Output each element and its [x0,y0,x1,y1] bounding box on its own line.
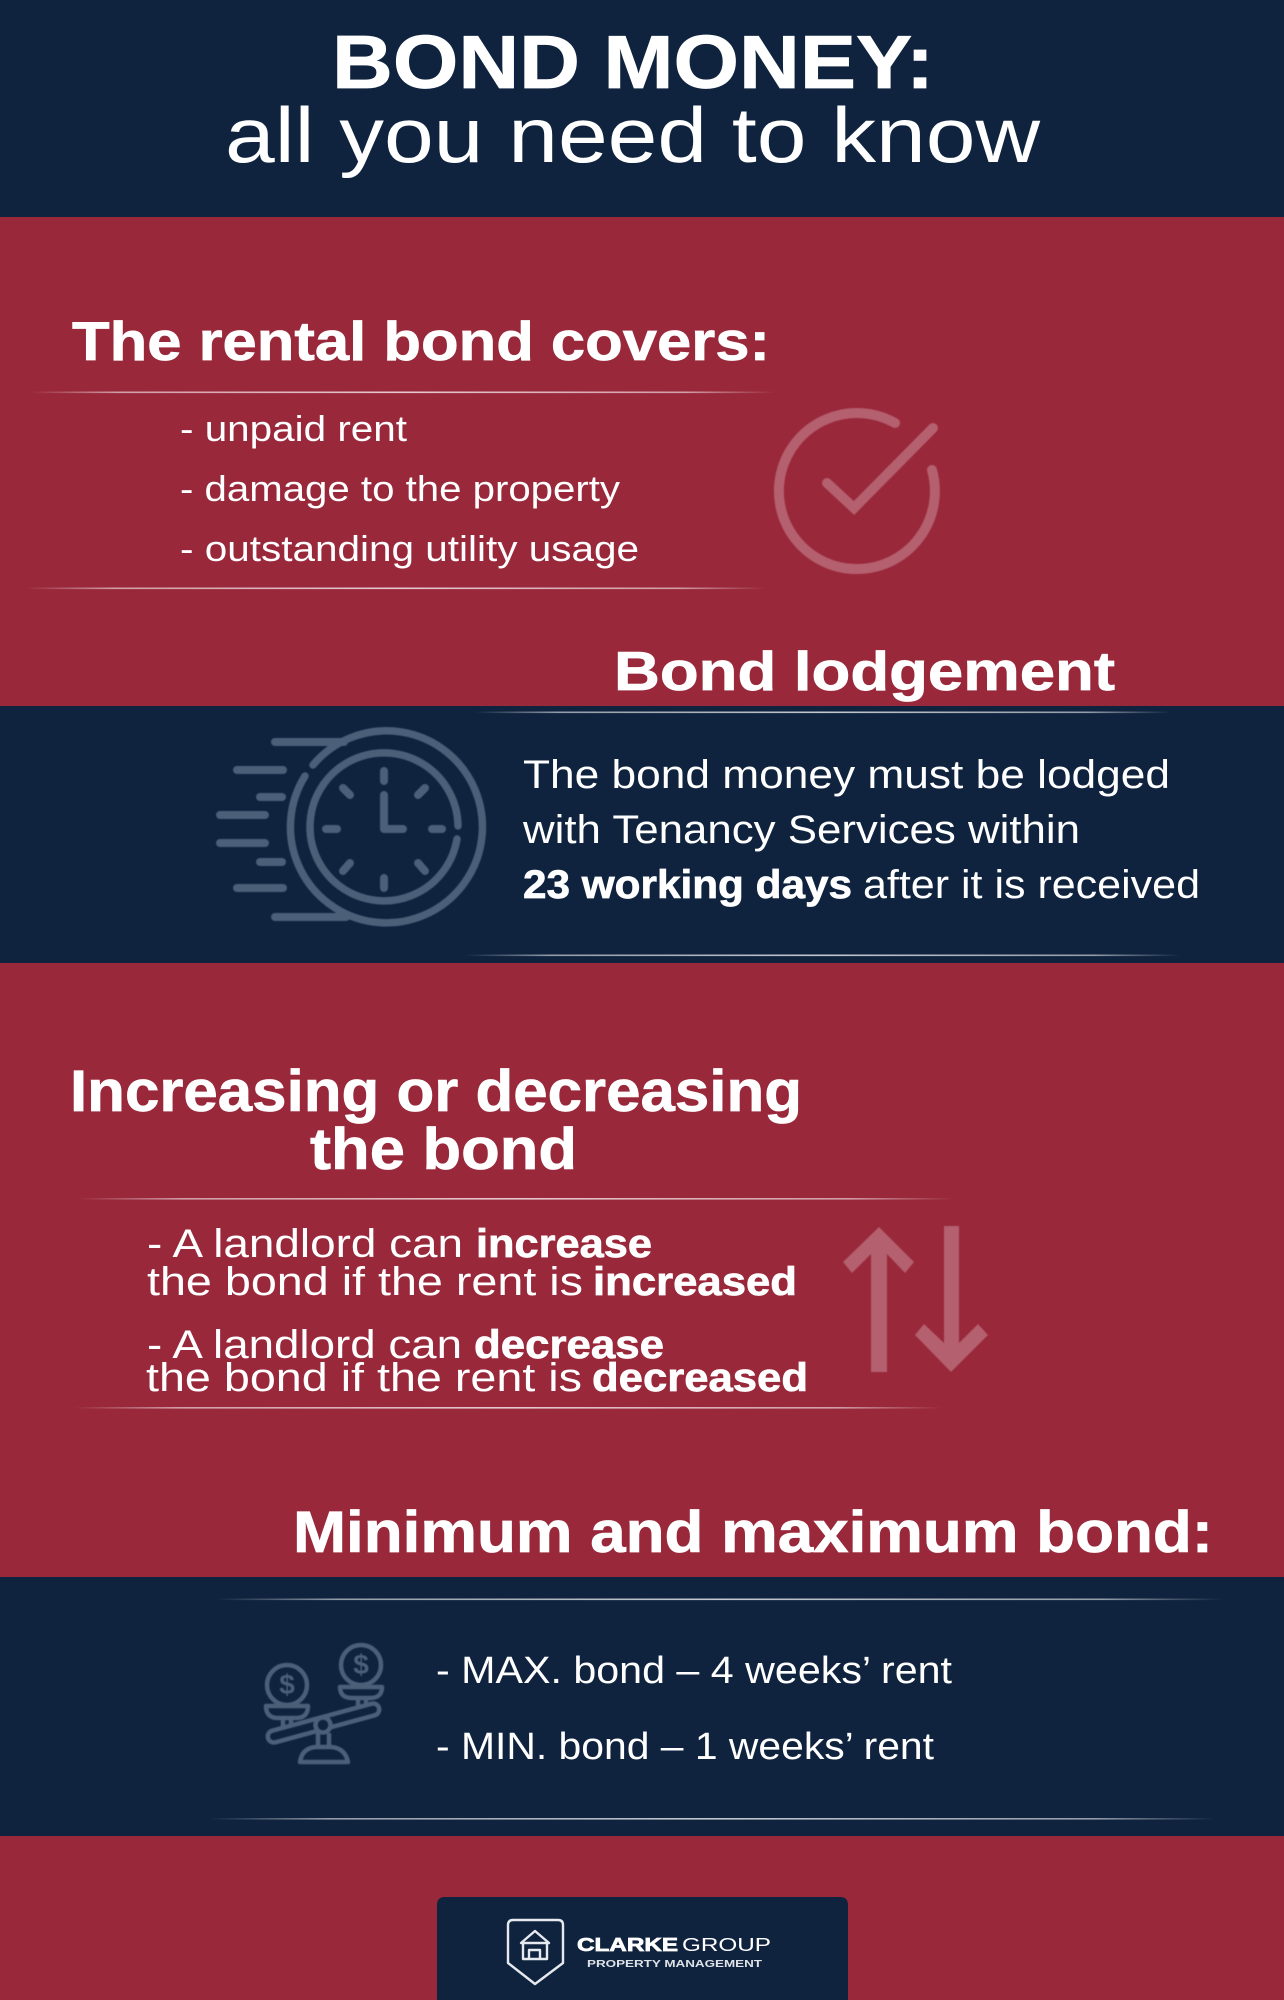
text: lodgement rule [522,753,1200,907]
text: max and min bond [436,1650,952,1768]
heading: increasing or decreasing the bond [70,1059,802,1182]
icon: check mark in circle [779,413,935,569]
title: bond money: BOND MONEY: [332,20,934,104]
list: what the bond covers: - damage to the property [180,468,620,509]
panel: bond lodgement [0,706,1284,963]
text: increase and decrease rules: - A landlord can [147,1222,463,1266]
panel: increasing or decreasing [70,1059,988,1409]
heading: the rental bond covers: The rental bond covers: [72,310,770,372]
logo wordmark: PROPERTY MANAGEMENT [587,1958,763,1970]
text: lodgement rule: 23 working days [523,863,852,907]
icon: shield with house [508,1920,563,1984]
text: increase and decrease rules: increased [593,1260,797,1304]
text: increase and decrease rules: the bond if the rent is [147,1260,583,1304]
icon: fast clock [220,731,482,923]
text: increase and decrease rules: decreased [592,1356,808,1400]
icon: up and down arrows [843,1226,988,1372]
logo wordmark: CLARKE [577,1935,678,1955]
logo wordmark: GROUP [682,1935,771,1955]
text: increase and decrease rules: the bond if the rent is [146,1356,582,1400]
text: increase and decrease rules [146,1222,808,1400]
heading: bond lodgement: Bond lodgement [614,640,1115,702]
text: lodgement rule: The bond money must be lodged [523,753,1170,797]
panel: header [0,0,1284,217]
heading: increasing or decreasing the bond: Increasing or decreasing [70,1059,802,1124]
logo wordmark [577,1935,771,1970]
text: lodgement rule: after it is received [863,863,1200,907]
icon: balance scale with coins: $ [353,1649,369,1680]
icon: balance scale with coins [266,1645,382,1762]
panel: rental bond covers [25,310,935,589]
text: max and min bond: - MIN. bond – 1 weeks’ rent [436,1726,934,1768]
text: lodgement rule: with Tenancy Services within [522,808,1080,852]
subtitle: all you need to know [225,91,1041,179]
heading: increasing or decreasing the bond: the bond [310,1117,577,1182]
panel: minimum and maximum bond [0,1577,1284,1836]
text: increase and decrease rules: decrease [474,1323,664,1367]
panel: logo card [437,1897,848,2000]
list: what the bond covers: - outstanding utility usage [180,528,639,569]
list: what the bond covers: - unpaid rent [180,408,407,449]
icon: balance scale with coins: $ [279,1669,295,1700]
list: what the bond covers [180,408,639,569]
heading: minimum and maximum bond: Minimum and maximum bond: [293,1500,1213,1565]
text: increase and decrease rules: - A landlord can [147,1323,462,1367]
text: max and min bond: - MAX. bond – 4 weeks’ rent [436,1650,952,1692]
text: increase and decrease rules: increase [476,1222,652,1266]
